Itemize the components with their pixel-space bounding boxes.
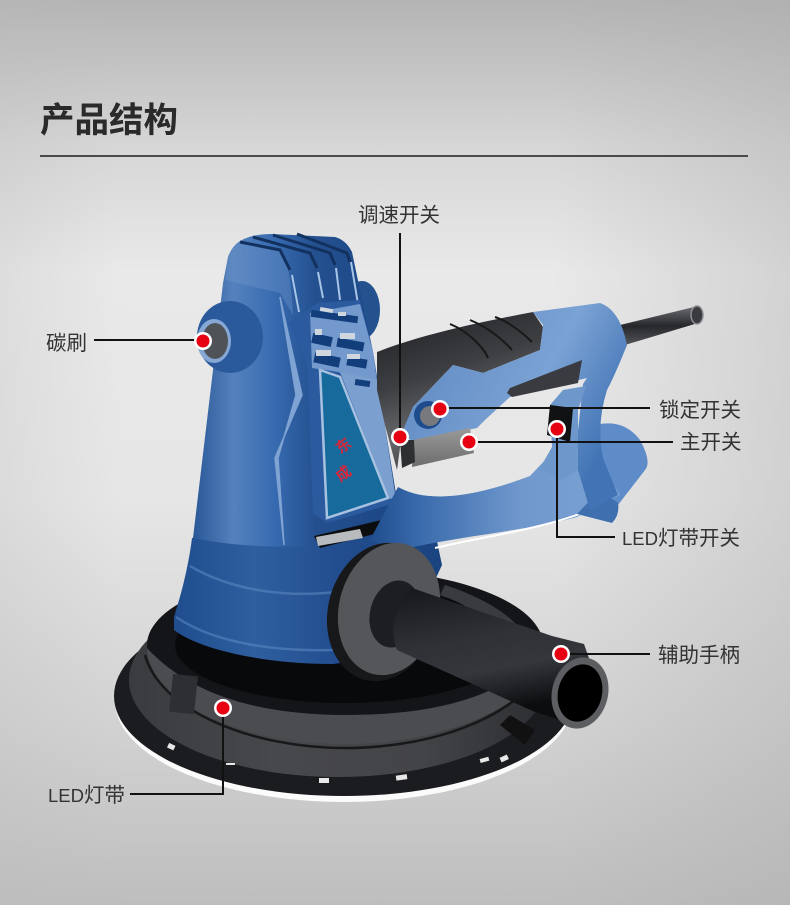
plate clips — [167, 743, 509, 783]
LED switch — [547, 405, 573, 442]
callout: 辅助手柄 — [552, 644, 740, 667]
rear knob — [344, 281, 380, 339]
brush cap knob — [197, 301, 263, 373]
auxiliary handle — [313, 531, 616, 735]
brand mark: 东 — [332, 434, 355, 457]
power cord — [620, 306, 703, 345]
column ribs — [240, 234, 350, 270]
callout: 辅助手柄: 辅助手柄 — [658, 644, 740, 667]
product: wall sander — [114, 234, 703, 802]
motor base — [174, 518, 442, 664]
callout: LED灯带开关 — [548, 420, 740, 550]
callout: LED灯带开关: LED灯带开关 — [622, 527, 740, 550]
callout: 碳刷 — [46, 332, 212, 355]
main trigger — [412, 428, 474, 467]
speed dial — [400, 440, 415, 468]
column side facet — [275, 297, 302, 545]
title rule — [40, 155, 748, 157]
rear cylinder — [585, 423, 648, 505]
callout: LED灯带: LED灯带 — [48, 784, 125, 807]
callout: 锁定开关: 锁定开关 — [659, 399, 741, 422]
callout: 调速开关 — [358, 204, 440, 446]
cooling slot — [314, 518, 390, 548]
tube highlight — [435, 510, 590, 548]
handle recess — [507, 360, 582, 397]
lock button — [414, 401, 442, 429]
motor column — [193, 234, 397, 547]
callout: 主开关: 主开关 — [680, 431, 742, 454]
callout: 主开关 — [460, 431, 742, 454]
grip grooves — [450, 317, 532, 358]
switch pillar — [540, 386, 586, 480]
base tier lines — [176, 566, 350, 650]
callout: 调速开关: 调速开关 — [358, 204, 440, 227]
callout: 锁定开关 — [431, 399, 741, 422]
rear foot — [577, 490, 618, 523]
handle grip — [377, 312, 543, 470]
brand mark second character: 成 — [332, 462, 355, 485]
title: 产品结构 — [40, 102, 178, 140]
handle body — [400, 303, 627, 510]
callout: 碳刷: 碳刷 — [46, 332, 87, 355]
column top shoulder — [225, 241, 293, 315]
callout: LED灯带 — [48, 699, 232, 807]
front panel — [288, 300, 396, 548]
lower tube — [370, 458, 620, 570]
sanding plate — [114, 569, 574, 802]
